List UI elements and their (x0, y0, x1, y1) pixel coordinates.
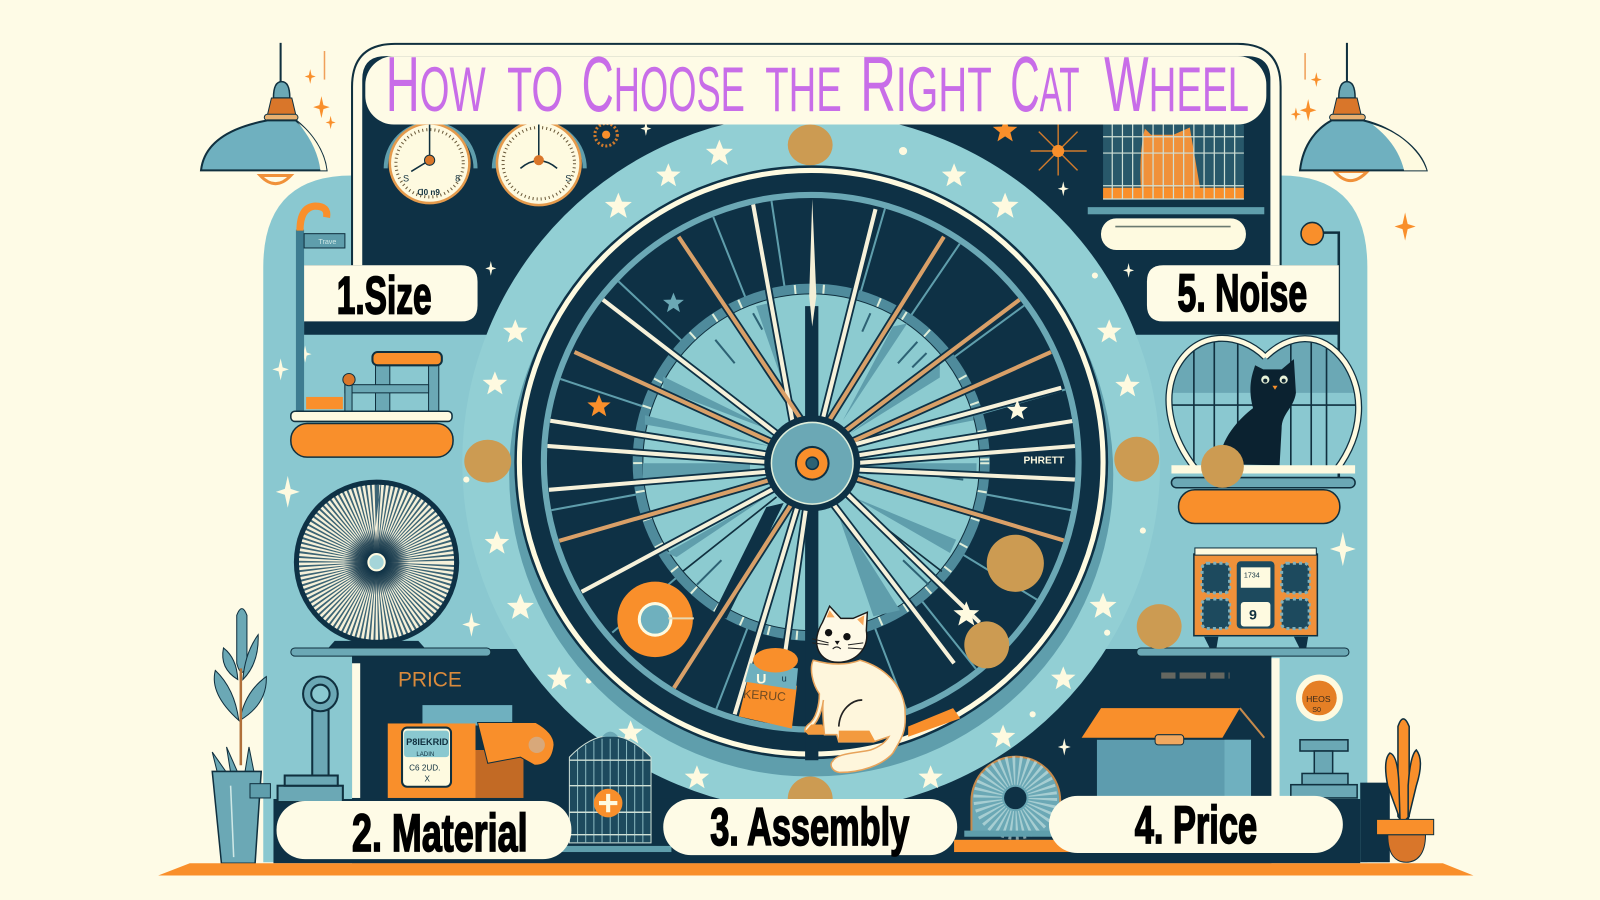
tan dot: right (1114, 437, 1159, 482)
title pill (365, 56, 1266, 124)
right gauge: S (565, 174, 571, 184)
wrench stand (278, 677, 343, 802)
plant (212, 609, 270, 863)
centre needle (809, 199, 816, 327)
teal wheel surround (462, 113, 1160, 811)
thin dark lines (683, 497, 942, 571)
label: assembly: 3. Assembly (710, 798, 910, 857)
panel: upper dark area (304, 56, 1339, 335)
caged orange cat (1088, 124, 1264, 214)
label: price: 4. Price (1135, 796, 1257, 855)
sunburst: small (595, 123, 617, 146)
title text: CHOOSE (582, 42, 745, 128)
label: size: 1.Size (337, 266, 432, 325)
wheel (509, 165, 1113, 777)
orange disc (617, 582, 694, 657)
orange jar: KERUC (743, 687, 787, 704)
panel: teal backdrop (263, 176, 1367, 862)
orange jar: U (756, 672, 766, 688)
rim cream band (519, 170, 1103, 754)
ring stars (272, 140, 1356, 788)
floor (158, 863, 1473, 876)
small fan (954, 757, 1072, 852)
left pole (300, 206, 345, 413)
left gauge (386, 122, 476, 203)
sunburst: large (1031, 124, 1087, 176)
left gauge: ᗡ0 n9 (417, 188, 440, 197)
badge (1296, 674, 1343, 721)
left lamp (201, 43, 327, 184)
thin radial lines (551, 194, 1071, 714)
inner disc (643, 294, 980, 631)
right pole and knob (1301, 222, 1339, 480)
price text: PRICE (398, 669, 462, 692)
wheel text: PHRETT (1023, 455, 1065, 466)
left gauge: 8 (455, 174, 460, 184)
left shelf (291, 648, 491, 656)
wheel stars (587, 293, 1028, 626)
panel: top frame (352, 44, 1281, 267)
title text: RIGHT (860, 42, 992, 128)
blurred sign (1161, 673, 1230, 679)
cardboard box (388, 705, 554, 798)
orange jar (739, 648, 798, 729)
press machine (1291, 740, 1357, 798)
title text: TO (507, 55, 563, 125)
round cage (559, 732, 671, 852)
label: material (277, 801, 571, 863)
inner ring (638, 289, 985, 636)
title (365, 42, 1266, 128)
label: noise (1147, 264, 1339, 323)
wheel rim (514, 165, 1108, 759)
orange sparkles (305, 51, 1416, 241)
cardboard box: C6 2UD. (409, 763, 440, 772)
cardboard box: P8IEKRID (406, 737, 449, 747)
right shelf (1137, 648, 1349, 656)
rim orange band (908, 708, 960, 737)
house box (1082, 708, 1264, 797)
title text: THE (765, 55, 842, 125)
tan dot: cabinet (1137, 604, 1182, 649)
disc wedges (643, 303, 977, 616)
left pole: Trave (318, 238, 336, 246)
title text: HOW (386, 42, 486, 128)
tan dot: wheel right (987, 535, 1044, 592)
black cat hoop (1163, 332, 1367, 523)
cat (805, 606, 905, 772)
tan dot: top (788, 124, 833, 165)
label: assembly (663, 798, 957, 857)
cactus (1377, 719, 1434, 862)
right lamp (1300, 43, 1427, 181)
cabinet: 1734 (1244, 572, 1260, 580)
cardboard box: X (424, 775, 430, 784)
label: price (1049, 796, 1343, 855)
left gauge: S (403, 174, 409, 184)
stool on orange bench (291, 352, 453, 457)
tan dot: bottom (788, 777, 833, 821)
spokes (546, 204, 1077, 719)
dark lower wedge (711, 503, 784, 618)
title text (386, 42, 1249, 128)
rim teal band (544, 195, 1079, 730)
hub (764, 415, 860, 511)
cabinet: 9 (1249, 607, 1257, 623)
tan dot: wheel lower (964, 621, 1009, 668)
inner ring ticks (638, 289, 985, 636)
cardboard box: LADIN (416, 751, 434, 758)
tan dot: left (464, 440, 511, 483)
tan dot: cat hoop (1201, 445, 1244, 488)
striped fan wheel (294, 480, 459, 650)
title text: CAT (1010, 42, 1080, 128)
dark side block (1360, 783, 1390, 862)
title text: WHEEL (1104, 42, 1249, 128)
cream plaque (1101, 218, 1246, 250)
wheel shadow (509, 172, 1113, 777)
label: material: 2. Material (352, 804, 528, 863)
label: noise: 5. Noise (1178, 264, 1307, 323)
dark centre stripes (805, 306, 818, 760)
orange jar: u (782, 674, 787, 684)
top stars (485, 118, 1134, 278)
right gauge (494, 121, 585, 205)
cabinet (1194, 548, 1317, 649)
badge: S0 (1312, 706, 1321, 714)
badge: HEOS (1306, 694, 1331, 704)
disc tick marks (657, 313, 963, 585)
panel: lower dark area (273, 649, 1360, 863)
